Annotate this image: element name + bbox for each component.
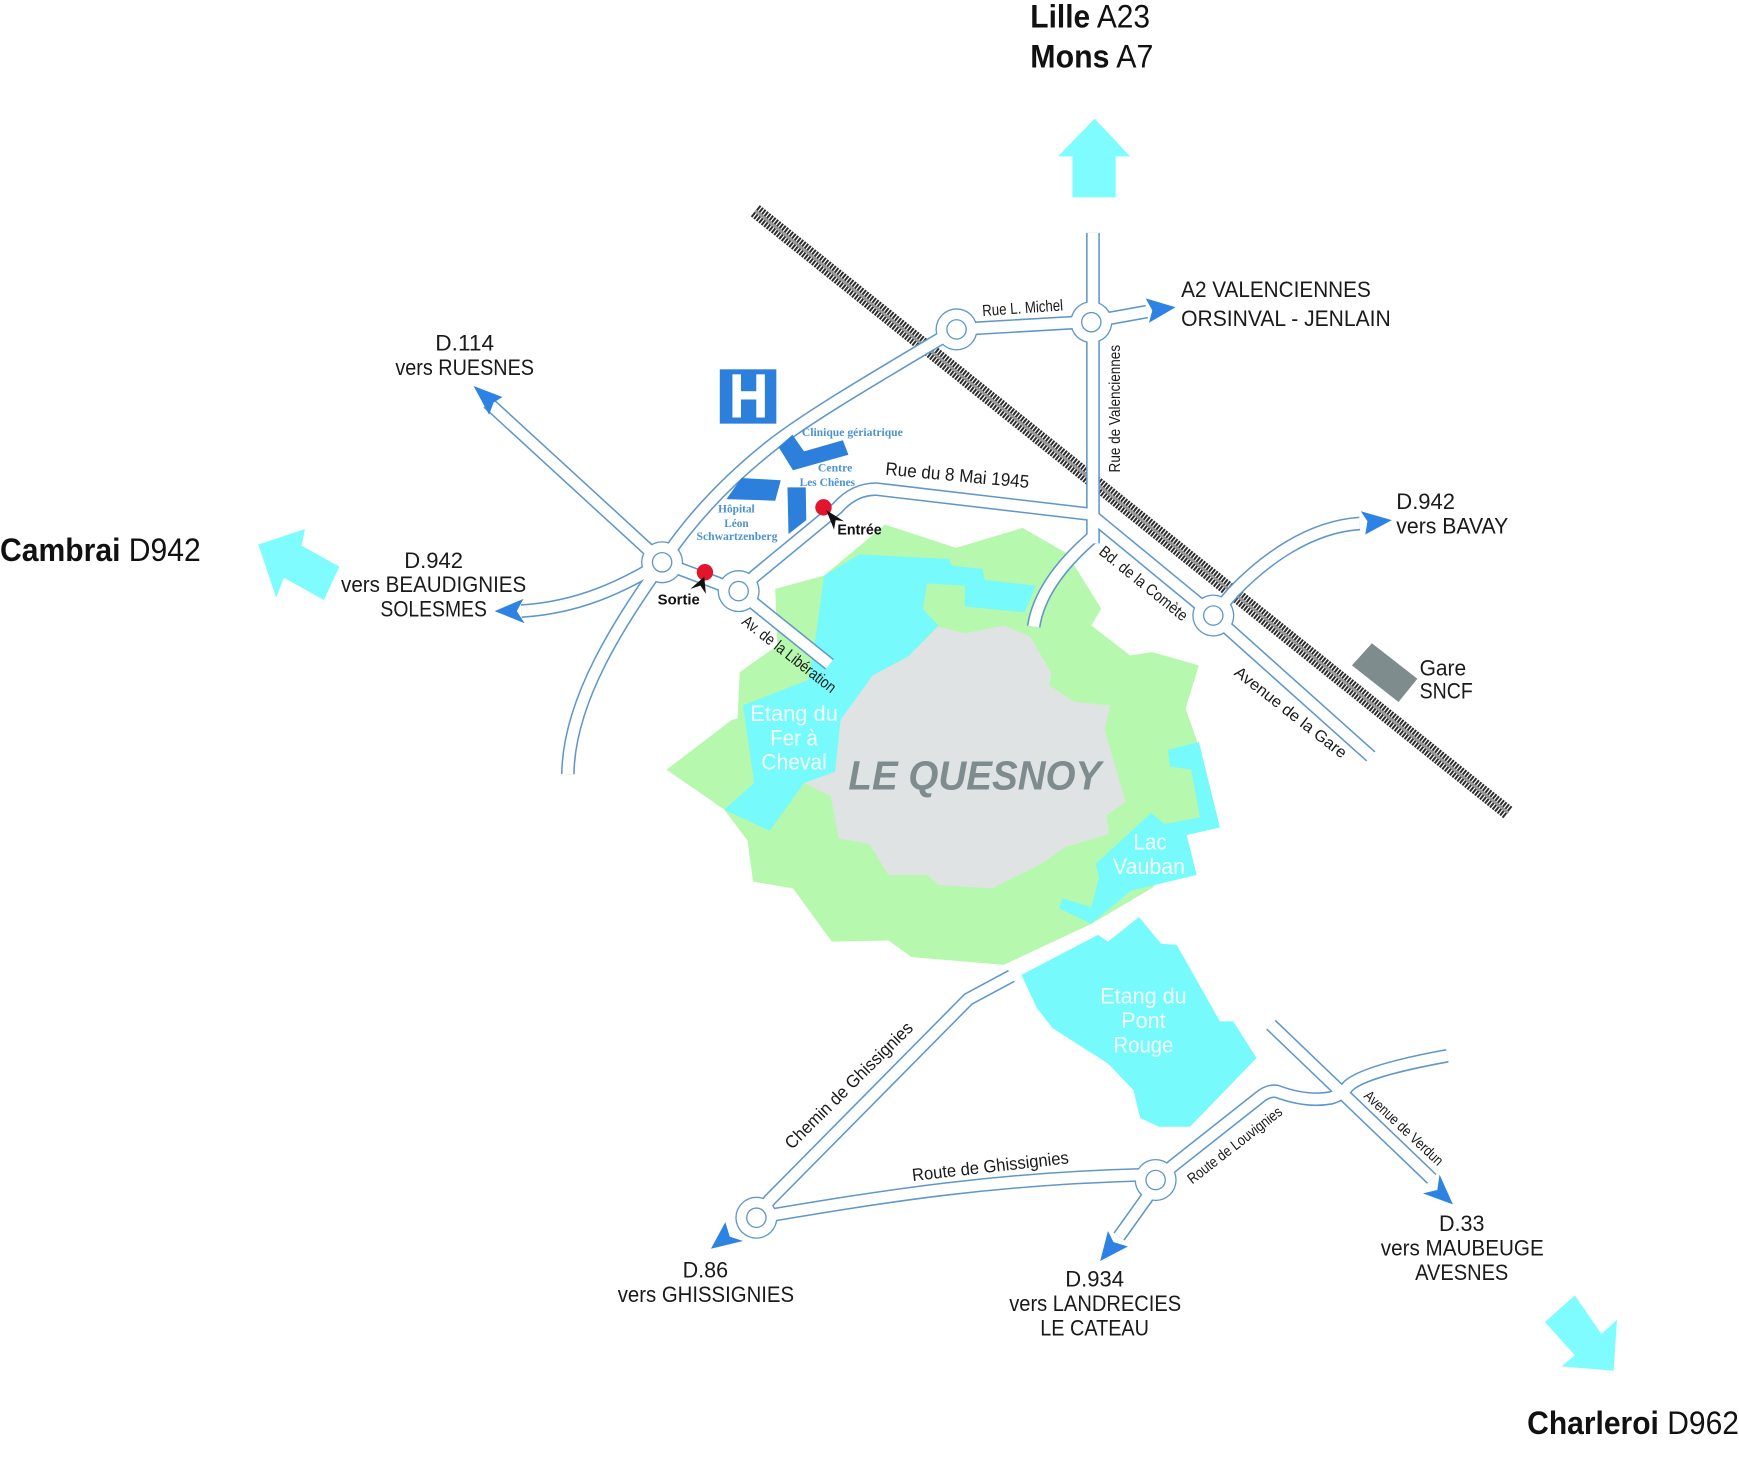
street: Route de Louvignies: Route de Louvignies: [1184, 1103, 1286, 1188]
street: Bd. de la Comete: Bd. de la Comète: [1095, 543, 1191, 625]
railway line: [755, 211, 1508, 813]
arrow: D.33 Maubeuge: [1423, 1174, 1453, 1204]
label: D.114: vers RUESNES: [395, 355, 534, 380]
label: D.942 Beaudignies: [341, 548, 526, 622]
big cyan arrow: south-east: [1545, 1295, 1617, 1371]
building label: Hopital Leon Schwartzenberg: Schwartzenberg: [696, 531, 778, 543]
building label: Centre Les Chenes: Centre: [818, 462, 852, 474]
building label: Centre Les Chenes: [800, 462, 856, 489]
green ramparts area: [667, 525, 1200, 965]
building label: Hopital Leon Schwartzenberg: [696, 503, 778, 543]
blue direction arrows: [474, 298, 1453, 1261]
arrow: A2 Valenciennes: [1146, 298, 1176, 323]
label: D.86: D.86: [683, 1258, 728, 1283]
label: Gare SNCF: SNCF: [1420, 679, 1473, 704]
label: A2 Valenciennes: [1181, 277, 1391, 331]
exit marker: [690, 564, 713, 594]
lake name: Etang du Fer a Cheval: Fer à: [770, 725, 819, 750]
lake name: Etang du Pont Rouge: [1100, 984, 1187, 1057]
label: D.942 Bavay: [1396, 489, 1508, 538]
label: D.86: vers GHISSIGNIES: [618, 1282, 794, 1307]
arrow: D.934 Landrecies: [1100, 1231, 1128, 1261]
label: D.934: D.934: [1065, 1266, 1124, 1291]
road network: [488, 233, 1447, 1239]
arrow: D.114 Ruesnes: [474, 386, 502, 415]
lake name: Etang du Pont Rouge: Etang du: [1100, 984, 1187, 1009]
arrow: D.942 Beaudignies: [495, 599, 525, 623]
lake name: Etang du Fer a Cheval: [750, 701, 838, 775]
label: D.934: [1009, 1266, 1181, 1340]
lake name: Lac Vauban: Vauban: [1113, 854, 1185, 879]
building label: Hopital Leon Schwartzenberg: Hôpital: [718, 503, 755, 515]
street: Rue de Valenciennes: Rue de Valenciennes: [1106, 345, 1124, 472]
label: A2 Valenciennes: A2 VALENCIENNES: [1181, 277, 1371, 302]
label: D.33: D.33: [1439, 1211, 1484, 1236]
lake name: Lac Vauban: Lac: [1133, 830, 1167, 855]
label: D.33: [1381, 1211, 1544, 1285]
label: D.942 Beaudignies: vers BEAUDIGNIES: [341, 572, 526, 597]
label: D.33: AVESNES: [1415, 1260, 1508, 1285]
icon: hospital sign: H: [729, 362, 768, 430]
label: D.942 Beaudignies: D.942: [404, 548, 463, 573]
lake: Etang du Pont Rouge: [1021, 917, 1257, 1127]
label: Entree: Entrée: [837, 522, 882, 539]
label: D.86: [618, 1258, 794, 1307]
lake: Lac Vauban: [1059, 742, 1220, 924]
label: Gare SNCF: Gare: [1420, 655, 1466, 680]
heading: Lille Mons: [1030, 0, 1153, 75]
lake: Etang du Fer a Cheval: [724, 555, 1036, 831]
street: Route de Ghissignies: Route de Ghissignies: [911, 1147, 1070, 1185]
street: Avenue de la Gare: Avenue de la Gare: [1231, 663, 1350, 762]
heading: Charleroi: Charleroi D962: [1527, 1405, 1739, 1441]
label: D.934: vers LANDRECIES: [1009, 1291, 1181, 1316]
building label: Centre Les Chenes: Les Chênes: [800, 477, 856, 489]
label: D.33: vers MAUBEUGE: [1381, 1235, 1544, 1260]
building label: Clinique geriatrique: Clinique gériatrique: [802, 427, 903, 439]
building: Hopital Leon Schwartzenberg: [726, 478, 781, 501]
label: Sortie: Sortie: [658, 591, 700, 608]
entry marker: [815, 499, 844, 530]
hospital buildings: [726, 435, 848, 534]
street: Avenue de Verdun: Avenue de Verdun: [1360, 1087, 1447, 1169]
lake name: Lac Vauban: [1113, 830, 1185, 879]
label: D.942 Bavay: vers BAVAY: [1396, 513, 1508, 538]
lake name: Etang du Fer a Cheval: Cheval: [761, 750, 827, 775]
building label: Hopital Leon Schwartzenberg: Léon: [724, 518, 749, 530]
building: Clinique geriatrique: [779, 435, 848, 470]
big cyan arrow: north: [1058, 119, 1130, 197]
station building: [1352, 643, 1417, 702]
town name: LE QUESNOY: [848, 753, 1105, 799]
street: Chemin de Ghissignies: Chemin de Ghissignies: [781, 1018, 917, 1153]
label: D.942 Beaudignies: SOLESMES: [380, 597, 487, 622]
street: Rue L. Michel: Rue L. Michel: [982, 296, 1064, 320]
label: D.942 Bavay: D.942: [1396, 489, 1455, 514]
label: D.934: LE CATEAU: [1040, 1315, 1149, 1340]
building: Centre Les Chenes: [787, 487, 806, 534]
lake name: Etang du Pont Rouge: Rouge: [1113, 1032, 1173, 1057]
label: D.114: [395, 330, 534, 380]
street: Rue du 8 Mai 1945: Rue du 8 Mai 1945: [885, 458, 1030, 492]
lake name: Etang du Pont Rouge: Pont: [1121, 1008, 1166, 1033]
lake name: Etang du Fer a Cheval: Etang du: [750, 701, 838, 726]
label: D.114: D.114: [435, 330, 494, 355]
label: A2 Valenciennes: ORSINVAL - JENLAIN: [1181, 306, 1391, 331]
big cyan arrow: west: [258, 529, 339, 600]
heading: Cambrai: Cambrai D942: [0, 532, 201, 568]
arrow: D.86 Ghissignies: [711, 1222, 743, 1249]
town centre area: [804, 625, 1126, 888]
arrow: D.942 Bavay: [1361, 511, 1392, 535]
label: Gare SNCF: [1420, 655, 1473, 704]
street: Av. de la Liberation: Av. de la Libération: [738, 612, 839, 697]
street names: [738, 296, 1447, 1188]
heading: Lille Mons: Mons A7: [1030, 39, 1153, 75]
